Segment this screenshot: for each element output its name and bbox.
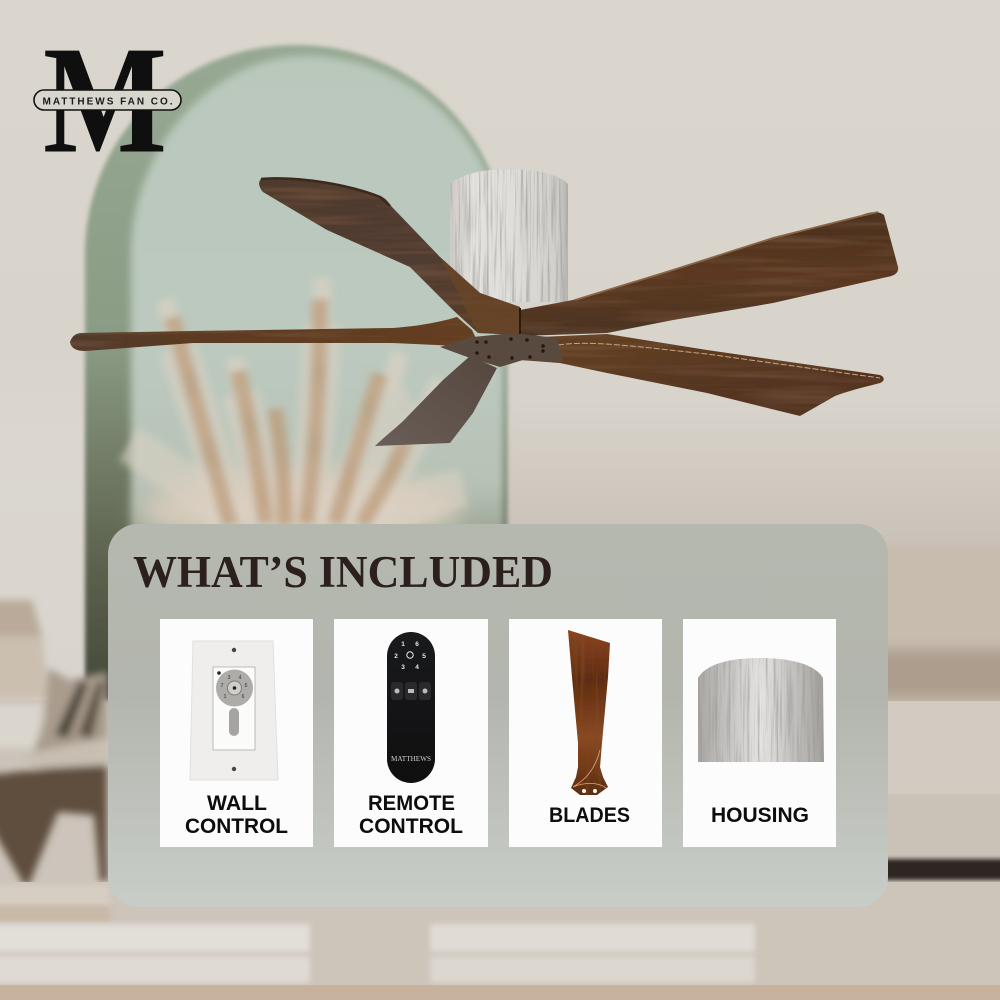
icon: remote: 1 bbox=[401, 641, 405, 648]
icon: remote bbox=[387, 632, 435, 783]
icon: remote: 4 bbox=[415, 664, 419, 671]
card: housing bbox=[683, 619, 836, 847]
icon: remote: 2 bbox=[394, 653, 398, 660]
label: remote control: CONTROL bbox=[359, 815, 463, 838]
logo: Matthews Fan Co.: M bbox=[43, 16, 167, 186]
logo: Matthews Fan Co.: MATTHEWS FAN CO. bbox=[42, 96, 173, 107]
icon: remote: MATTHEWS bbox=[391, 755, 431, 763]
icon: wall control: 7 bbox=[221, 683, 224, 689]
background: right sofa bbox=[870, 545, 1000, 880]
icon: wall control: 6 bbox=[242, 694, 245, 700]
label: blades: BLADES bbox=[549, 804, 630, 827]
icon: remote: 6 bbox=[415, 641, 419, 648]
icon: remote: 5 bbox=[422, 653, 426, 660]
card: blades bbox=[509, 619, 662, 847]
icon: remote: 3 bbox=[401, 664, 405, 671]
background: arched alcove bbox=[85, 45, 507, 720]
icon: wall control: 5 bbox=[245, 683, 248, 689]
icon: wall control: 3 bbox=[228, 675, 231, 681]
label: wall control: CONTROL bbox=[185, 815, 288, 838]
background: left armchair and throw bbox=[0, 600, 108, 890]
label: remote control bbox=[359, 792, 463, 838]
icon: wall control: 1 bbox=[224, 694, 227, 700]
icon: wall control bbox=[190, 641, 278, 780]
icon: wall control: 4 bbox=[239, 675, 242, 681]
card: remote control bbox=[334, 619, 488, 847]
fan housing bbox=[450, 169, 568, 302]
label: wall control: WALL bbox=[207, 792, 267, 815]
label: wall control bbox=[185, 792, 288, 838]
heading: WHAT’S INCLUDED bbox=[133, 547, 553, 597]
blade: upper right bbox=[520, 212, 898, 336]
icon: housing bbox=[698, 658, 824, 762]
blade: lower bbox=[375, 356, 497, 446]
blade: lower right bbox=[520, 334, 884, 416]
background: floor bbox=[0, 882, 1000, 1000]
background: pampas grass bbox=[130, 278, 462, 548]
fan hub bbox=[440, 333, 563, 367]
blade: long left bbox=[70, 317, 480, 351]
card: wall control bbox=[160, 619, 313, 847]
icon: blade bbox=[568, 630, 610, 795]
blade: upper left bbox=[259, 177, 520, 335]
ceiling fan bbox=[70, 169, 898, 446]
panel: what's included bbox=[108, 524, 888, 907]
label: housing: HOUSING bbox=[711, 804, 809, 827]
label: remote control: REMOTE bbox=[368, 792, 455, 815]
